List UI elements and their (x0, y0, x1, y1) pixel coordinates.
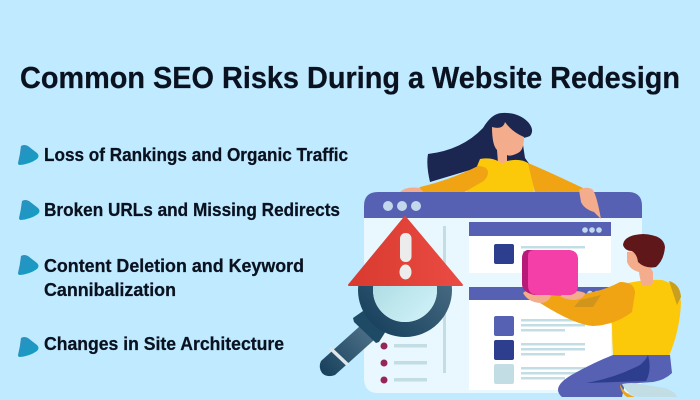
sidebar list (380, 342, 427, 384)
bullet 1: Loss of Rankings: Loss of Rankings and Organic Traffic (44, 145, 348, 165)
bullet 2: Broken URLs: Broken URLs and Missing Redirects (44, 200, 340, 220)
magnifying glass (320, 250, 444, 376)
bullet 3: Content Deletion: Content Deletion and Keyword (44, 256, 304, 276)
illustration (320, 113, 681, 397)
upper content panel (469, 222, 611, 273)
woman figure (400, 113, 583, 193)
woman pointing hand (579, 188, 601, 219)
man figure (522, 234, 681, 397)
lower content panel (469, 287, 611, 390)
bullet 4: Site Architecture: Changes in Site Architecture (44, 334, 284, 354)
browser window (364, 192, 642, 393)
pink box held by man (522, 250, 578, 295)
warning triangle (349, 217, 462, 285)
bullet 3: Content Deletion: Cannibalization (44, 280, 176, 300)
bullet 3: Content Deletion (18, 255, 304, 300)
risk list (18, 145, 348, 357)
